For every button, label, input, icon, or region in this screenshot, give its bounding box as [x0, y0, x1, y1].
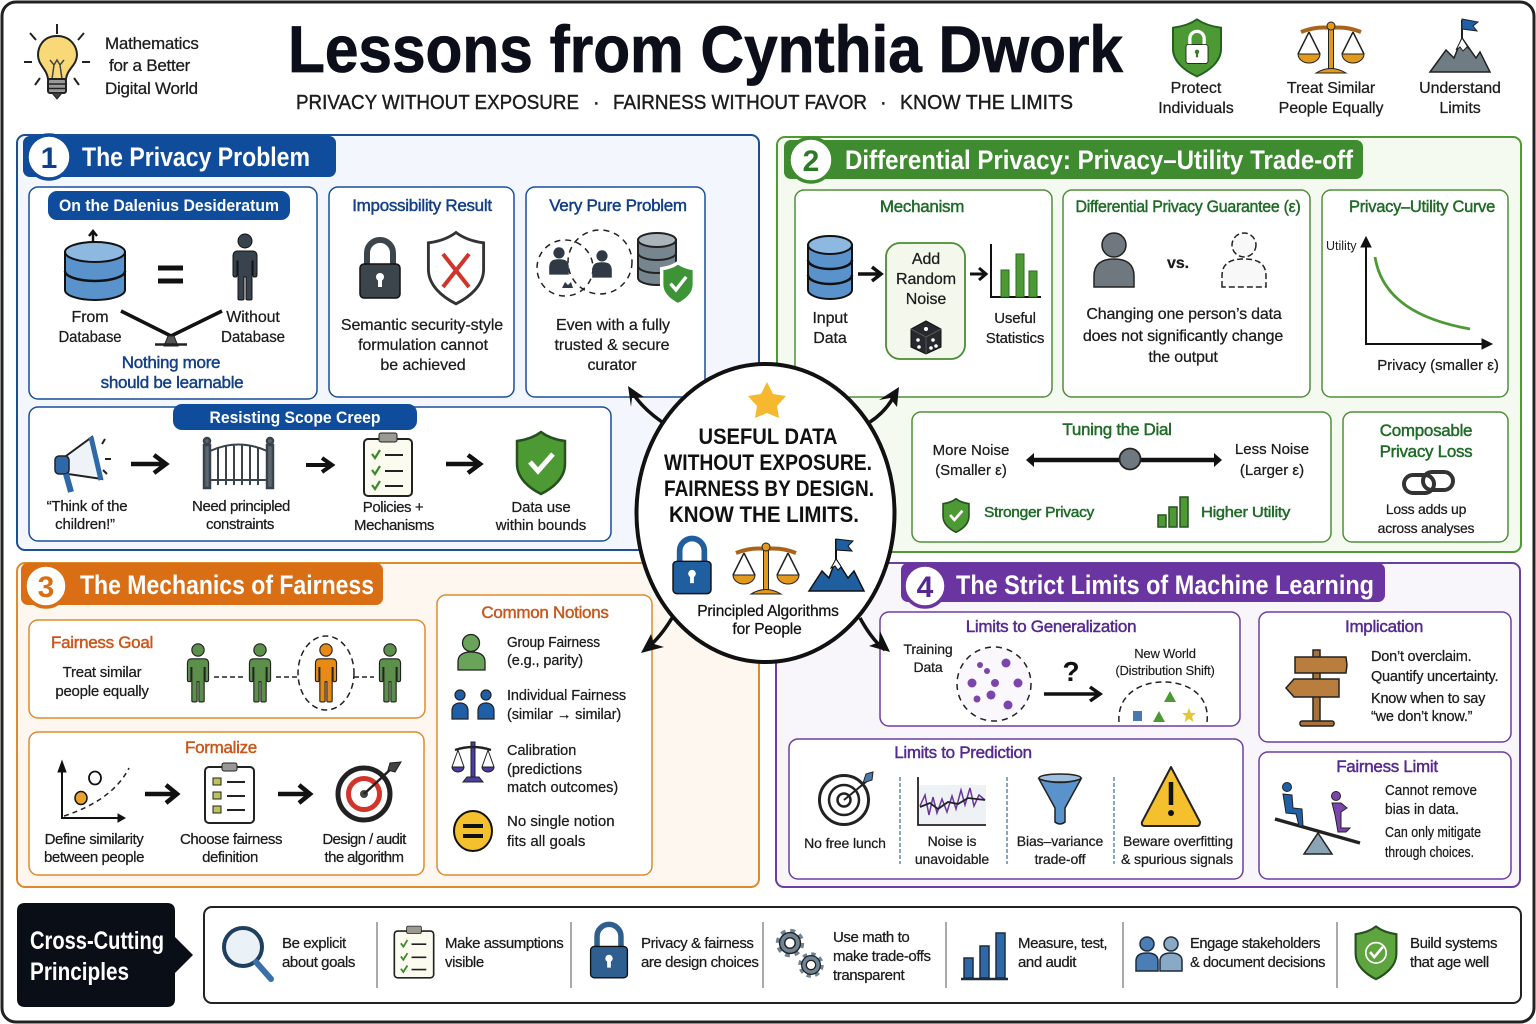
heading band 4: [901, 563, 1385, 607]
label: Data: [913, 659, 943, 675]
card: resisting scope creep: [29, 404, 611, 541]
icon: clipboard: [394, 926, 434, 978]
body text: Can only mitigate: [1385, 825, 1481, 841]
body text: “we don’t know.”: [1371, 709, 1473, 725]
heading: Composable: [1380, 421, 1472, 440]
icon: clipboard: [364, 433, 412, 496]
body text: across analyses: [1378, 520, 1475, 536]
person highlighted: [315, 644, 337, 702]
heading: Very Pure Problem: [549, 196, 687, 215]
heading: Mechanism: [880, 197, 964, 216]
heading: Tuning the Dial: [1062, 420, 1172, 439]
icon: checklist: [205, 763, 254, 823]
label: New World: [1134, 646, 1196, 661]
callout: nothing more: Nothing more: [122, 353, 220, 372]
label: Data: [813, 330, 847, 347]
label: Statistics: [986, 330, 1044, 347]
heading: Fairness Goal: [51, 633, 153, 652]
principle text: about goals: [282, 954, 355, 971]
icon: star: [748, 382, 786, 418]
title: Lessons from Cynthia Dwork: [288, 12, 1123, 86]
heading: Limits to Generalization: [966, 617, 1136, 636]
icon: green shield check: [517, 432, 565, 494]
label: from database: Database: [58, 329, 122, 346]
icon: target: [820, 772, 873, 824]
principle text: Engage stakeholders: [1190, 935, 1320, 952]
principle text: make trade-offs: [833, 948, 931, 965]
body text: Loss adds up: [1386, 501, 1467, 517]
label: definition: [202, 849, 258, 866]
body text: Know when to say: [1371, 691, 1486, 707]
individual fairness: Individual Fairness: [507, 688, 626, 704]
label: within bounds: [495, 517, 586, 534]
label: Data use: [511, 499, 571, 516]
pill heading: On the Dalenius Desideratum: [59, 196, 279, 215]
body text: Changing one person’s data: [1086, 306, 1282, 323]
icon: training data scatter: [957, 647, 1031, 721]
principle text: Use math to: [833, 929, 909, 946]
dividers: [900, 777, 1114, 864]
slider: [1026, 448, 1222, 470]
icon: input database: [808, 236, 852, 299]
hub text: FAIRNESS BY DESIGN.: [664, 476, 874, 501]
chart: curve: Utility: [1326, 239, 1357, 253]
arrow: [858, 267, 881, 281]
subtitle: KNOW THE LIMITS: [900, 92, 1073, 114]
principle text: & document decisions: [1190, 954, 1325, 971]
dashed links: [214, 676, 374, 678]
panel 1: the privacy problem: [17, 135, 759, 550]
icon: person: [458, 634, 485, 670]
heading band 1: The Privacy Problem: [82, 142, 310, 172]
dividers: [377, 922, 1337, 988]
icon: noise chart: [918, 777, 986, 825]
body text: trusted & secure: [555, 337, 670, 354]
hub ellipse: [636, 364, 894, 662]
heading band 3: [21, 563, 383, 607]
heading band 1: [23, 135, 336, 179]
body text: be achieved: [380, 357, 466, 374]
label: the algorithm: [325, 849, 404, 866]
icon: lock: [360, 240, 400, 298]
calibration: Calibration: [507, 743, 576, 759]
vs: vs.: [1167, 255, 1189, 272]
arrow: [970, 268, 986, 280]
label: Mechanisms: [354, 517, 434, 534]
cross-cutting principles label: Principles: [30, 958, 129, 986]
label: understand limits: Understand: [1419, 80, 1501, 97]
label: without database: Without: [226, 309, 280, 326]
body text: Quantify uncertainty.: [1371, 669, 1498, 685]
group fairness: (e.g., parity): [507, 653, 583, 669]
label: & spurious signals: [1121, 851, 1233, 867]
pill heading: [173, 404, 417, 430]
icon: protect individuals shield: [1173, 19, 1221, 76]
heading band 2: 2: [803, 145, 819, 178]
card: implication: [1259, 612, 1511, 742]
dashed circle: [298, 636, 354, 710]
label: Define similarity: [45, 831, 144, 848]
card: privacy-utility curve: [1322, 190, 1508, 397]
chart: useful statistics: [991, 244, 1041, 297]
label: treat similar: Treat Similar: [1287, 80, 1376, 97]
icon: chain: [1404, 472, 1453, 493]
panel 3: the mechanics of fairness: [17, 563, 759, 887]
heading band 3: The Mechanics of Fairness: [80, 570, 374, 600]
pill heading: Resisting Scope Creep: [210, 408, 380, 427]
callout: nothing more: should be learnable: [101, 373, 243, 392]
label: protect individuals: Protect: [1171, 80, 1222, 97]
label: Design / audit: [322, 831, 407, 848]
card: impossibility result: [329, 187, 514, 397]
body text: Cannot remove: [1385, 783, 1477, 799]
label: Choose fairness: [180, 831, 282, 848]
hub text: WITHOUT EXPOSURE.: [664, 450, 872, 475]
heading: Formalize: [185, 738, 257, 757]
icon: gate: [204, 438, 273, 488]
principle text: Build systems: [1410, 935, 1497, 952]
label: between people: [44, 849, 144, 866]
icon: shield: [943, 499, 969, 532]
label: understand limits: Limits: [1439, 100, 1481, 117]
card: very pure problem: [526, 187, 705, 397]
label: Input: [812, 310, 848, 327]
label: Bias–variance: [1017, 833, 1104, 849]
icon: people in dashed circles: [537, 230, 632, 296]
heading: Common Notions: [481, 603, 609, 622]
body text: people equally: [55, 683, 149, 700]
hub text: KNOW THE LIMITS.: [669, 502, 859, 527]
heading band 2: Differential Privacy: Privacy–Utility Trade-off: [845, 145, 1354, 175]
box: add random noise: Noise: [906, 291, 946, 308]
label: Less Noise: [1235, 441, 1309, 458]
chart: curve: [1326, 237, 1492, 349]
person: [187, 644, 209, 702]
question mark: ?: [1062, 656, 1080, 687]
arrow: [131, 455, 166, 473]
label: (Smaller ε): [935, 462, 1007, 479]
card: guarantee: [1063, 190, 1310, 397]
subtitle: FAIRNESS WITHOUT FAVOR: [613, 92, 867, 114]
heading: Privacy Loss: [1380, 442, 1472, 461]
subtitle: ·: [880, 92, 887, 114]
icon: lock: [591, 924, 627, 978]
central hub: [628, 364, 899, 662]
icon: magnifier: [224, 928, 271, 979]
principle text: Measure, test,: [1018, 935, 1107, 952]
box: add random noise: [886, 243, 965, 359]
hub caption: for People: [732, 621, 802, 638]
header: [24, 12, 1501, 117]
body text: through choices.: [1385, 845, 1474, 861]
heading band 4: 4: [917, 571, 934, 604]
icon: warning: [1142, 767, 1200, 826]
icon: database: [65, 231, 125, 300]
heading: Privacy–Utility Curve: [1349, 197, 1495, 216]
icon: database with shield: [638, 233, 694, 305]
icon: scale: [452, 742, 494, 782]
principle text: are design choices: [641, 954, 759, 971]
principle text: and audit: [1018, 954, 1077, 971]
body text: the output: [1148, 349, 1218, 366]
icon: bars: [961, 933, 1008, 979]
label: Noise is: [928, 833, 977, 849]
label: (Larger ε): [1240, 462, 1304, 479]
label: Need principled: [192, 498, 290, 515]
labels: “Think of the: [47, 498, 127, 515]
no single notion: No single notion: [507, 813, 615, 830]
body text: does not significantly change: [1083, 328, 1283, 345]
tagline: Digital World: [105, 79, 198, 98]
icon: die: [911, 321, 941, 354]
arrow: [306, 458, 332, 472]
card: tuning the dial: [912, 412, 1331, 542]
heading: Implication: [1345, 617, 1423, 636]
heading band 3: 3: [38, 571, 54, 604]
principle text: Be explicit: [282, 935, 347, 952]
card: composable privacy loss: [1343, 412, 1508, 542]
label: Beware overfitting: [1123, 833, 1233, 849]
hub caption: Principled Algorithms: [697, 603, 839, 620]
labels: children!”: [55, 516, 115, 533]
card: formalize: [29, 732, 424, 875]
icon: lightbulb: [24, 24, 90, 99]
card: mechanism: [795, 190, 1052, 397]
panel 4: limits of machine learning: [776, 563, 1520, 887]
body text: Don’t overclaim.: [1371, 649, 1471, 665]
cross-cutting principles label: [17, 903, 193, 1007]
card: Dalenius desideratum: [29, 187, 317, 399]
group fairness: Group Fairness: [507, 635, 600, 651]
icon: shield with x: [428, 232, 484, 304]
label: Policies +: [363, 499, 424, 516]
icon: scale: [733, 543, 799, 594]
icon: equals circle: [454, 811, 492, 851]
heading band 2: [784, 138, 1363, 182]
icon: dashed person: [1222, 233, 1266, 287]
icon: scale: [1298, 22, 1364, 73]
card: limits to prediction: [789, 739, 1243, 879]
equals sign: [158, 268, 183, 281]
icon: person: [1094, 233, 1134, 287]
body text: Even with a fully: [556, 317, 670, 334]
panel 2: differential privacy: [777, 137, 1521, 552]
principle text: Make assumptions: [445, 935, 563, 952]
label: (Distribution Shift): [1115, 663, 1215, 678]
arrows from hub: [628, 386, 899, 653]
axis label: Privacy (smaller ε): [1377, 357, 1499, 374]
label: constraints: [206, 516, 274, 533]
label: Training: [903, 641, 953, 657]
chart: similarity: [58, 761, 129, 822]
label: treat similar: People Equally: [1279, 100, 1383, 117]
person: [249, 644, 271, 702]
label: trade-off: [1035, 851, 1086, 867]
icon: bars: [1158, 497, 1188, 527]
higher utility: Higher Utility: [1201, 504, 1291, 521]
tagline: for a Better: [109, 56, 191, 75]
icon: gears: [778, 931, 822, 976]
body text: bias in data.: [1385, 802, 1459, 818]
heading: Impossibility Result: [352, 196, 492, 215]
no single notion: fits all goals: [507, 833, 585, 850]
heading: Limits to Prediction: [894, 743, 1032, 762]
heading: Fairness Limit: [1336, 757, 1438, 776]
body text: Semantic security-style: [341, 317, 503, 334]
label: Useful: [994, 310, 1036, 327]
arrow: [145, 785, 177, 803]
subtitle: PRIVACY WITHOUT EXPOSURE: [296, 92, 579, 114]
heading band 1: 1: [41, 142, 57, 175]
icon: mountain: [809, 539, 864, 591]
icon: mountain: [1430, 19, 1490, 72]
individual fairness: (similar → similar): [507, 707, 621, 723]
arrow: [446, 455, 480, 473]
icon: new world shapes: [1119, 682, 1207, 722]
icon: signpost: [1286, 650, 1347, 726]
label: without database: Database: [221, 329, 285, 346]
icon: shield: [1356, 926, 1396, 979]
label: unavoidable: [915, 851, 989, 867]
balance beam: [121, 311, 222, 346]
pill heading: [48, 191, 290, 220]
calibration: (predictions: [507, 762, 582, 778]
icon: seesaw: [1275, 782, 1360, 854]
stronger privacy: Stronger Privacy: [984, 504, 1095, 521]
body text: curator: [587, 357, 637, 374]
box: add random noise: Add: [912, 251, 940, 268]
body text: formulation cannot: [358, 337, 489, 354]
heading: Differential Privacy Guarantee (ε): [1076, 197, 1300, 216]
cross-cutting principles label: Cross-Cutting: [30, 927, 164, 955]
label: protect individuals: Individuals: [1158, 100, 1234, 117]
box: add random noise: Random: [896, 271, 956, 288]
icon: person: [233, 234, 257, 300]
icon: people: [1136, 937, 1182, 971]
principle text: visible: [445, 954, 484, 971]
principles strip: [204, 907, 1521, 1003]
label: More Noise: [933, 442, 1009, 459]
icon: funnel: [1039, 774, 1081, 824]
card: fairness goal: [29, 620, 425, 718]
body text: Treat similar: [63, 664, 142, 681]
calibration: match outcomes): [507, 780, 618, 796]
principle text: transparent: [833, 967, 906, 984]
arrow: [1044, 687, 1100, 701]
card: fairness limit: [1259, 752, 1511, 879]
icon: megaphone: [55, 437, 111, 492]
card: common notions: [437, 595, 652, 875]
icon: two people: [452, 690, 494, 719]
label: No free lunch: [804, 835, 886, 851]
icon: bullseye: [338, 762, 401, 820]
principle text: Privacy & fairness: [641, 935, 753, 952]
label: from database: From: [72, 309, 108, 326]
principle text: that age well: [1410, 954, 1489, 971]
icon: blue lock: [673, 538, 711, 594]
tagline: Mathematics: [105, 34, 199, 53]
heading band 4: The Strict Limits of Machine Learning: [956, 570, 1374, 600]
person: [379, 644, 401, 702]
subtitle: ·: [593, 92, 600, 114]
arrow: [278, 785, 310, 803]
card: limits to generalization: [880, 612, 1240, 726]
hub text: USEFUL DATA: [698, 424, 838, 449]
